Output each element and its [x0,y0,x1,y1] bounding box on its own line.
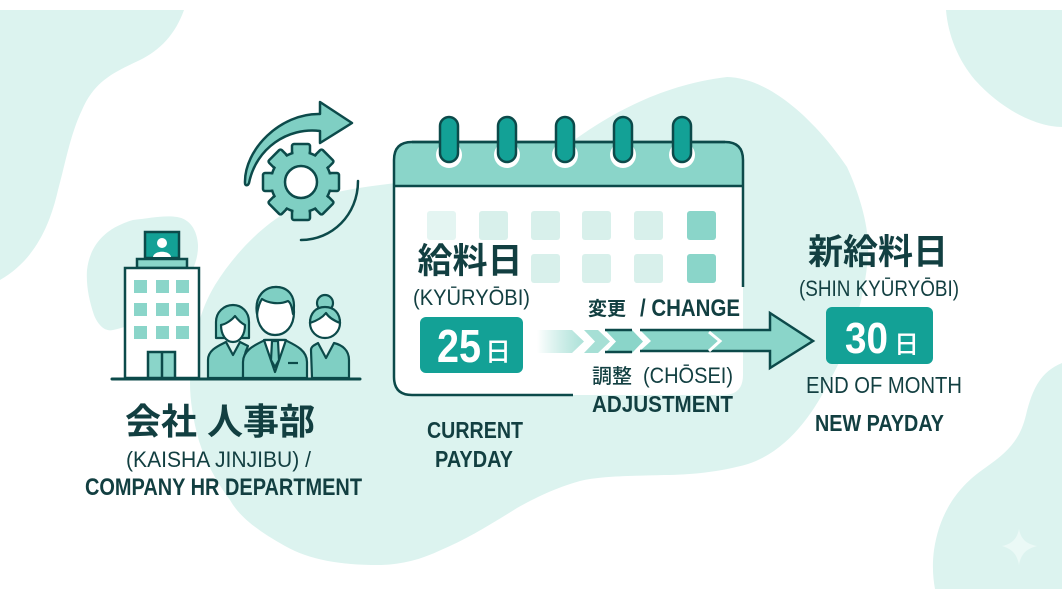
badge: 30 days [826,307,933,364]
text: company HR department: COMPANY HR DEPARTMENT [85,474,362,501]
text: kaisha jinjibu reading: (KAISHA JINJIBU) / [126,447,312,472]
arrow: change from 25th to 30th [537,313,813,368]
calendar rings [412,117,725,168]
icon: man center [243,287,307,378]
label: adjustment reading: 調整 [592,360,632,389]
calendar day squares [427,211,716,283]
icon: woman right [310,295,349,378]
icon: lower arc [301,181,358,240]
badge: 25 days [420,317,523,373]
icon: sparkle [1002,529,1037,565]
badge: 25 days: 25 [437,320,481,372]
label: current payday: PAYDAY [435,446,513,472]
text: end of month: END OF MONTH [806,372,962,398]
heading: company HR: 会社 [125,393,197,445]
label: change [588,294,740,322]
label: adjustment reading [592,360,733,389]
label: change: / CHANGE [640,295,740,322]
label: current payday [427,417,523,472]
label: change: 変更 [588,294,626,321]
label: adjustment reading: (CHŌSEI) [643,363,733,388]
badge: 30 days: 日 [894,325,919,361]
badge: 25 days: 日 [485,332,511,369]
text: kyuryobi reading: (KYŪRYŌBI) [413,285,530,310]
icon: office building [125,232,199,378]
text: shin kyuryobi reading: (SHIN KYŪRYŌBI) [799,276,959,301]
heading: new payday kanji: 新給料日 [808,224,948,275]
label: new payday: NEW PAYDAY [815,410,944,436]
heading: company HR: 人事部 [207,393,315,445]
ground line [112,378,360,380]
icon: gear [263,144,339,220]
icon: woman left [208,305,249,378]
icon: curved process arrow [245,102,352,185]
heading: current payday kanji: 給料日 [417,233,523,284]
label: adjustment: ADJUSTMENT [592,391,733,417]
label: current payday: CURRENT [427,417,523,443]
panel: calendar [394,117,743,395]
badge: 30 days: 30 [845,314,888,363]
